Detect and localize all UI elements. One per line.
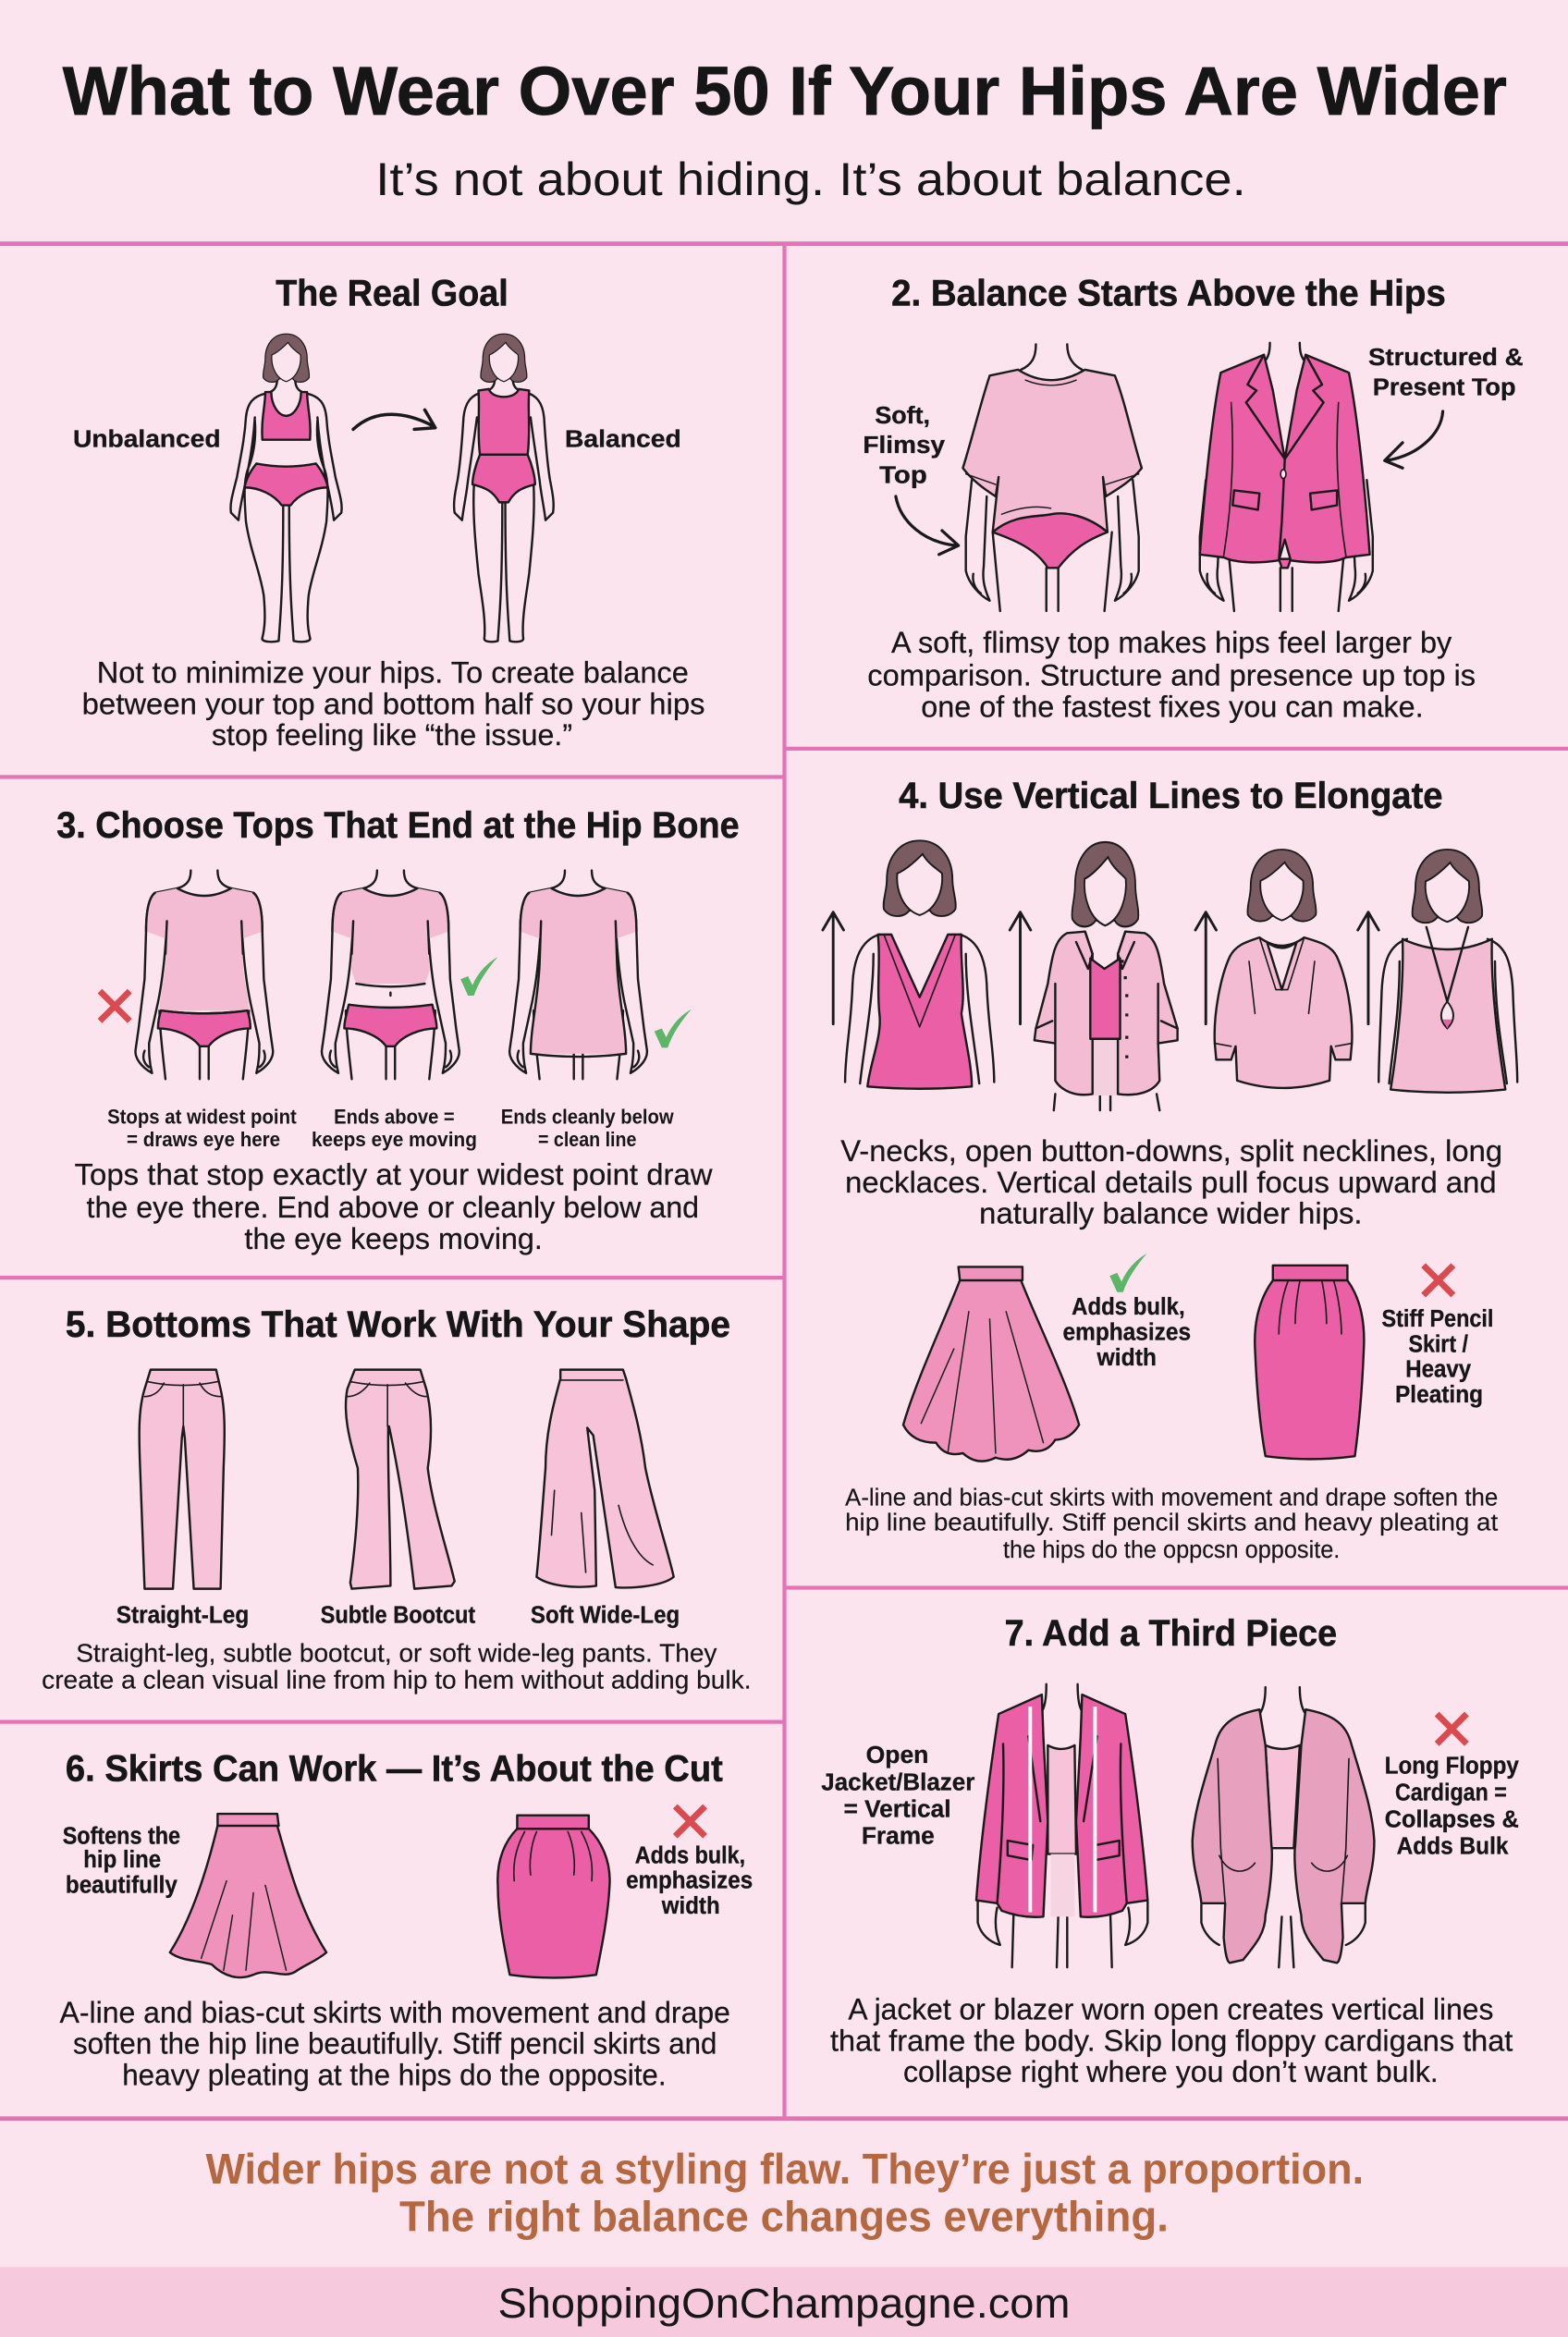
label: long floppy cardigan: Adds Bulk xyxy=(1397,1834,1509,1860)
body text: skirts note xyxy=(845,1485,1498,1563)
icon: red x xyxy=(100,991,129,1021)
label: stiff pencil skirt: Pleating xyxy=(1395,1382,1483,1408)
heading: section 4: 4. Use Vertical Lines to Elongate xyxy=(899,775,1443,816)
label: long floppy cardigan xyxy=(1385,1754,1519,1860)
body text: section 4 xyxy=(840,1134,1502,1230)
label: soft wide-leg: Soft Wide-Leg xyxy=(531,1603,680,1629)
closing message: Wider hips are not a styling flaw. They’re just a proportion. xyxy=(205,2145,1364,2193)
pants: subtle bootcut xyxy=(346,1370,455,1589)
caption: ends below: = clean line xyxy=(538,1128,636,1151)
label: balanced: Balanced xyxy=(565,427,681,453)
pants: straight-leg xyxy=(140,1370,225,1589)
figure: long floppy cardigan xyxy=(1193,1687,1374,1967)
figure: open button-down xyxy=(1035,842,1178,1110)
label: stiff pencil skirt: Skirt / xyxy=(1408,1331,1468,1357)
body text: real goal: Not to minimize your hips. To create balance xyxy=(97,655,689,689)
heading: the real goal: The Real Goal xyxy=(276,273,508,314)
arrow: unbalanced to balanced xyxy=(353,410,435,429)
label: adds bulk: emphasizes xyxy=(626,1868,753,1894)
label: open jacket: Open xyxy=(866,1743,928,1768)
body text: section 7: collapse right where you don’t want bulk. xyxy=(903,2055,1439,2088)
label: open jacket: = Vertical xyxy=(843,1796,951,1822)
skirt: a-line xyxy=(903,1266,1079,1462)
body text: skirts note: A-line and bias-cut skirts with movement and drape soften the xyxy=(845,1485,1498,1511)
icon: red x xyxy=(1437,1714,1466,1744)
panel: skirts xyxy=(0,1724,782,2116)
closing message xyxy=(205,2145,1364,2240)
label: softens the hip line xyxy=(63,1823,180,1899)
panel: vertical lines xyxy=(786,752,1568,1585)
body text: section 7: that frame the body. Skip long floppy cardigans that xyxy=(830,2024,1513,2057)
label: soft flimsy top xyxy=(863,403,946,488)
heading: section 2: 2. Balance Starts Above the Hips xyxy=(891,273,1446,314)
arrow: up 1 xyxy=(823,912,843,1024)
label: open jacket xyxy=(821,1743,974,1849)
label: softens the hip line: hip line xyxy=(83,1847,161,1873)
label: stiff pencil skirt: Stiff Pencil xyxy=(1381,1306,1493,1332)
figure: tank with long necklace xyxy=(1378,850,1517,1093)
label: structured top xyxy=(1368,345,1524,400)
footer band xyxy=(0,2267,1568,2337)
pants: soft wide-leg xyxy=(536,1370,674,1587)
panel: bottoms xyxy=(0,1280,782,1720)
figure: top stops at widest point xyxy=(136,871,273,1079)
title: What to Wear Over 50 If Your Hips Are Wider xyxy=(63,53,1507,129)
arrow: up 2 xyxy=(1010,912,1031,1024)
body text: section 2: A soft, flimsy top makes hips feel larger by xyxy=(891,626,1452,659)
panel: third piece xyxy=(786,1590,1568,2116)
figure: soft flimsy tee xyxy=(962,344,1142,611)
body text: section 5: Straight-leg, subtle bootcut, or soft wide-leg pants. They xyxy=(76,1638,717,1668)
body text: section 3: the eye keeps moving. xyxy=(244,1222,543,1255)
body text: section 6 xyxy=(59,1996,730,2091)
caption: ends above: keeps eye moving xyxy=(312,1128,477,1151)
body text: section 3: Tops that stop exactly at your widest point draw xyxy=(75,1158,713,1192)
figure: top ends below hip xyxy=(509,871,647,1079)
caption: ends below xyxy=(501,1106,674,1151)
label: soft flimsy top: Top xyxy=(879,462,927,488)
icon: green check xyxy=(460,957,497,996)
body text: section 4: naturally balance wider hips. xyxy=(979,1197,1363,1230)
body text: section 6: A-line and bias-cut skirts with movement and drape xyxy=(59,1996,730,2029)
figure: top ends above hip xyxy=(322,871,459,1079)
label: adds bulk: Adds bulk, xyxy=(635,1842,745,1868)
body text: real goal xyxy=(82,655,705,752)
footer band: ShoppingOnChampagne.com xyxy=(497,2280,1071,2327)
caption: stops at widest point: Stops at widest point xyxy=(107,1106,297,1129)
label: adds bulk xyxy=(1062,1294,1191,1371)
label: unbalanced: Unbalanced xyxy=(73,427,221,453)
body text: section 2: comparison. Structure and presence up top is xyxy=(867,659,1476,692)
label: subtle bootcut: Subtle Bootcut xyxy=(321,1603,476,1629)
label: structured top: Present Top xyxy=(1373,374,1516,400)
label: long floppy cardigan: Collapses & xyxy=(1385,1807,1519,1833)
label: structured top: Structured & xyxy=(1368,345,1524,371)
label: long floppy cardigan: Long Floppy xyxy=(1385,1754,1519,1780)
heading: section 3: 3. Choose Tops That End at the Hip Bone xyxy=(56,804,740,846)
body text: section 3: the eye there. End above or cleanly below and xyxy=(87,1191,699,1224)
arrow: up 4 xyxy=(1358,912,1378,1024)
body text: section 4: V-necks, open button-downs, split necklines, long xyxy=(840,1134,1502,1168)
closing message: The right balance changes everything. xyxy=(399,2192,1169,2240)
label: stiff pencil skirt: Heavy xyxy=(1405,1357,1472,1383)
panel: the real goal xyxy=(0,246,782,775)
heading: section 5: 5. Bottoms That Work With Your Shape xyxy=(66,1303,730,1345)
skirt: bias-cut a-line xyxy=(170,1814,326,1977)
label: soft flimsy top: Soft, xyxy=(875,403,930,429)
body text: section 6: soften the hip line beautifully. Stiff pencil skirts and xyxy=(73,2027,717,2061)
body text: section 7: A jacket or blazer worn open creates vertical lines xyxy=(848,1993,1493,2026)
arrow: to flimsy top xyxy=(896,496,959,555)
label: adds bulk: width xyxy=(661,1893,720,1919)
skirt: stiff pleated pencil xyxy=(497,1816,610,1977)
body text: skirts note: hip line beautifully. Stiff pencil skirts and heavy pleating at xyxy=(845,1511,1498,1536)
panel: balance starts above the hips xyxy=(786,246,1568,747)
label: adds bulk: width xyxy=(1096,1345,1157,1371)
skirt: pencil xyxy=(1255,1266,1364,1459)
label: straight-leg: Straight-Leg xyxy=(116,1603,249,1629)
label: stiff pencil skirt xyxy=(1381,1306,1493,1408)
figure: split-neck blouse xyxy=(1215,850,1352,1088)
body text: section 2 xyxy=(867,626,1476,724)
label: softens the hip line: Softens the xyxy=(63,1823,180,1849)
figure: balanced body xyxy=(454,334,554,642)
icon: red x xyxy=(675,1806,705,1836)
body text: skirts note: the hips do the oppcsn opposite. xyxy=(1003,1537,1340,1563)
body text: real goal: stop feeling like “the issue.” xyxy=(212,718,572,752)
label: open jacket: Frame xyxy=(862,1823,935,1849)
arrow: up 3 xyxy=(1195,912,1217,1024)
body text: section 4: necklaces. Vertical details pull focus upward and xyxy=(845,1166,1497,1199)
subtitle: It’s not about hiding. It’s about balance. xyxy=(375,153,1246,205)
body text: real goal: between your top and bottom half so your hips xyxy=(82,687,705,720)
label: softens the hip line: beautifully xyxy=(66,1873,178,1899)
body text: section 2: one of the fastest fixes you can make. xyxy=(921,691,1424,724)
caption: ends above: Ends above = xyxy=(334,1106,455,1129)
label: adds bulk: Adds bulk, xyxy=(1072,1294,1185,1320)
body text: section 5: create a clean visual line from hip to hem without adding bulk. xyxy=(42,1665,752,1695)
caption: stops at widest point: = draws eye here xyxy=(127,1128,280,1151)
icon: green check xyxy=(655,1009,692,1047)
body text: section 6: heavy pleating at the hips do the opposite. xyxy=(122,2058,667,2091)
icon: green check xyxy=(1109,1254,1147,1292)
figure: v-neck tank xyxy=(845,840,994,1089)
heading: section 7: 7. Add a Third Piece xyxy=(1005,1612,1337,1654)
arrow: to blazer xyxy=(1385,411,1443,468)
panel: tops that end at the hip bone xyxy=(0,779,782,1276)
label: open jacket: Jacket/Blazer xyxy=(821,1769,974,1795)
figure: structured blazer xyxy=(1200,343,1373,611)
icon: red x xyxy=(1424,1266,1453,1295)
figure: unbalanced body xyxy=(230,334,342,642)
label: adds bulk: emphasizes xyxy=(1062,1319,1191,1345)
label: long floppy cardigan: Cardigan = xyxy=(1395,1780,1507,1806)
figure: open blazer xyxy=(976,1684,1147,1967)
body text: section 7 xyxy=(830,1993,1513,2088)
caption: ends below: Ends cleanly below xyxy=(501,1106,674,1129)
label: soft flimsy top: Flimsy xyxy=(863,433,946,459)
heading: section 6: 6. Skirts Can Work — It’s About the Cut xyxy=(66,1748,723,1790)
caption: ends above xyxy=(312,1106,477,1151)
body text: section 5 xyxy=(42,1638,752,1695)
body text: section 3 xyxy=(75,1158,713,1255)
caption: stops at widest point xyxy=(107,1106,297,1151)
label: adds bulk xyxy=(626,1842,753,1919)
